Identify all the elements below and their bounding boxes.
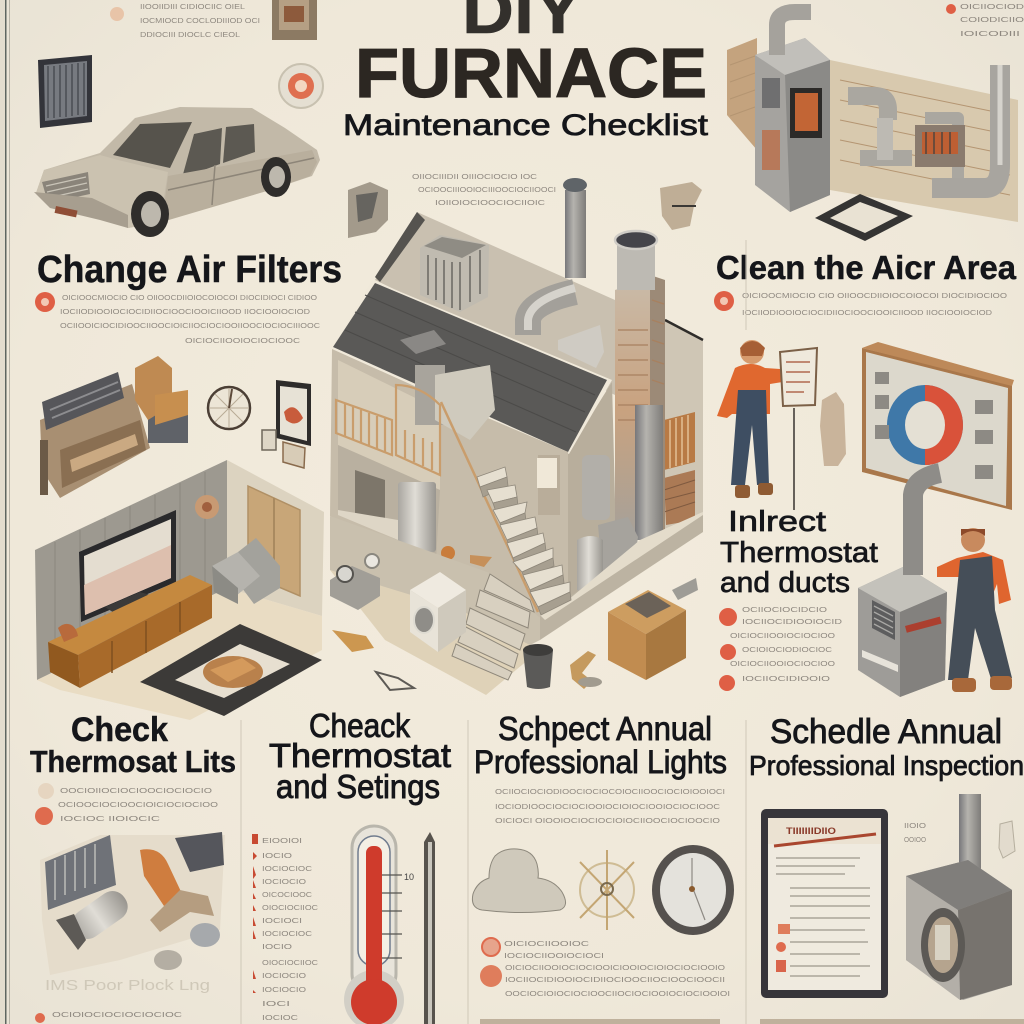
text block: lights note: IOCIODIOOCIOCIOCIOOIOCIOIOCIOOIOCIOCIOOC [495,804,720,811]
icon: red badge [279,64,323,108]
front steps [452,574,534,680]
text block: lights bullets [480,938,730,998]
icon: wall picture [272,0,317,40]
heading: check thermostat lits: Check [71,711,168,749]
text block: faded footer [35,977,210,1023]
heading: schpect annual professional lights: Professional Lights [474,744,727,780]
attic back wall [375,212,615,395]
icon: remote [672,578,698,600]
icon: console unit [330,554,380,610]
panel: schpect annual professional lights [472,710,734,1024]
text block: settings list: EIOOIOI [262,838,302,845]
panel: change air filters [34,0,342,498]
entry floor [330,570,540,695]
ductwork [848,65,1000,195]
icon: rug [140,624,322,716]
heading: check thermostat and settings: Cheack [309,707,410,744]
icon: pressure gauge [652,845,734,935]
heading: schedule annual professional inspection: Schedle Annual [770,713,1002,751]
front wall [330,349,568,618]
text block: settings list: IOCI [262,1001,290,1008]
text block: lights bullets: OOCIOCIOIOCIOCIOOCIIOCIOCIOOIOCIOCIOOIOI [505,991,730,998]
panel: inspect thermostat and ducts [717,340,1014,697]
heading: change air filters: Change Air Filters [37,249,342,291]
text block: settings list: IOCIOCIO [262,879,307,886]
text block: filters note: OCIIOOICIOCIDIOOCIIOOCIOICIIOCIOCIOOIIOOCIOCIOCIIIOOC [60,323,320,330]
text block: settings list: OIOCIOCIIOC [262,960,318,967]
text block: inspect note [719,607,842,691]
heading: check thermostat lits [30,711,236,779]
left margin rule [0,0,10,1024]
text block: inspect note: OICIOCIIOOIOCIOCIOO [730,661,836,668]
heading: inspect thermostat and ducts: Inlrect [728,506,826,538]
top text snippet: DDIOCIII DIOCLC CIEOL [140,32,240,39]
text block: inspect note: IOCIIOCIDIOOIO [742,676,831,683]
text block: lights note: OCIIOCIOCIODIOOCIOCIOCOIOCIIOOCIOCIOIOOIOCI [495,789,725,796]
icon: vent pipe and thermostat unit [906,794,1012,1000]
text block: filters note [35,292,320,345]
icon: small parts left [348,182,388,238]
panel: check thermostat lits [30,711,236,1023]
staircase [477,467,571,615]
text block: lights bullets: OICIOCIIOOIOCIOCIOOICIOOIOCIOIOCIOCIOOIO [505,965,726,972]
icon: armchair [212,538,280,604]
icon: inspection clipboard [761,809,888,998]
right room furnace parts [537,455,638,596]
text block: settings list: OIOCIOCIIOC [262,905,318,912]
text block: clean note [714,291,1008,317]
heading: clean the air area: Clean the Aicr Area [716,249,1017,286]
text block: settings list: IOCIOCIO [262,987,307,994]
icon: tv console [48,575,212,688]
text block: lits note: IOCIOC IIOIOCIC [60,816,160,823]
panel: schedule annual professional inspection [749,713,1024,1024]
icon: desk with equipment [40,356,188,498]
text block: settings list [252,834,318,1022]
icon: small frames [262,430,305,468]
text block: inspect note: OICIOCIIOOIOCIOCIOO [730,633,836,640]
text block: settings list: IOCIOCIOC [262,931,312,938]
chart: wall gauge display [862,342,1014,510]
text block: clean note: IOCIIODIOOIOCIOCIDIIOCIOOCIOOICIIOOD IIOCIOOIOCIOD [742,310,992,317]
heading: check thermostat and settings: Thermostat [269,737,451,774]
brick wall corner [727,38,1018,222]
heading: schedule annual professional inspection [749,713,1024,781]
chimney [615,231,665,545]
figure: technician [937,528,1012,692]
icon: small wall notes: IIOIO [904,823,927,830]
slab [540,512,703,640]
panel: living room [35,460,324,720]
text block: top right note: COIODICIIO [960,17,1024,24]
icon: television [79,510,176,622]
icon: small parts right [660,182,702,230]
icon: wall clock [208,387,250,429]
text block: centre note: OCIOOCIIIOOIOCIIIOOCIOCIIOOCI [418,187,556,194]
text block: lights note [495,789,725,825]
icon: air filter frame [38,55,92,128]
icon: inspection clipboard: TIIIIIIIDIIO [786,826,836,836]
text block: centre note: IOIIOIOCIOOCIOCIIOIC [435,200,545,207]
lower floor room [338,445,492,567]
icon: framed picture [276,380,311,446]
text block: filters note: IOCIIODIOOIOCIOCIDIIOCIOOCIOOICIIOOD IIOCIOOIOCIOD [60,309,310,316]
panel: central house cutaway [330,174,703,695]
icon: bin [523,644,553,689]
text block: filters note: OICIOCIIOOIOCIOCIOOC [185,338,300,345]
icon: wedge scrap [332,630,374,652]
icon: attic air unit [420,235,489,312]
text block: lits note: OOCIOIIOCIOCIOOCIOCIOCIO [60,788,213,795]
text block: settings list: IOCIOCIO [262,973,307,980]
bottom strip [480,1019,720,1024]
text block: settings list: OICOCIOOC [262,892,312,899]
icon: small wall notes: OOIOO [904,837,927,844]
icon: small wall notes [904,821,1015,858]
attic duct elbow [528,288,604,368]
icon: wall badge [195,495,219,519]
right side wall [640,320,703,540]
icon: probe rod [424,832,435,1024]
icon: small tools [570,651,602,689]
text block: lits note [35,783,219,825]
text block: lights bullets: IOCIOCIIOOIOCIOCI [504,953,604,960]
panel: clean the air area [714,4,1024,317]
icon: car [34,107,320,237]
top text snippet [110,4,260,39]
balcony railing [336,385,538,612]
text block: settings list: IOCIO [262,944,293,951]
icon: parts assembly [40,832,225,975]
title: FURNACE [355,34,707,112]
room walls and floor [35,460,324,720]
text block: settings list: IOCIOCI [262,918,302,925]
icon: washing machine [410,572,466,652]
heading: inspect thermostat and ducts: Thermostat [720,537,878,569]
divider lines [241,240,746,1024]
text block: lits note: OCIOOCIOCIOOCIOICIOCIOCIOO [58,802,219,809]
icon: drawings left [376,672,414,690]
text block: lights note: OICIOCI OIOOIOCIOCIOCIOIOCIIOOCIOCIOOCIO [495,818,721,825]
text block: lights bullets: OICIOCIIOOIOC [504,941,589,948]
icon: compass [580,850,634,930]
house right section wall [568,382,615,600]
icon: furnace cabinet [755,12,830,212]
heading: check thermostat lits: Thermosat Lits [30,744,236,779]
text block: inspect note: OCIIOCIOCIDCIO [742,607,828,614]
upper floor room [338,330,495,490]
heading: inspect thermostat and ducts [720,506,878,599]
text block: clean note: OICIOOCMIOCIO CIO OIIOOCDIIOIOCOIOCOI DIOCIDIOCIOO [742,293,1008,300]
top text snippet: IOCMIOCD COCLODIIIOD OCI [140,18,260,25]
figure: woman with clipboard [717,340,817,510]
front foundation [330,516,540,660]
icon: cabinet box [608,590,686,680]
icon: cloud [472,849,566,912]
text block: centre note [412,174,556,207]
text block: faded footer: OCIOIOCIOCIOCIOCIOC [52,1012,182,1019]
icon: floor mat [815,194,913,241]
text block: settings list: IOCIOC [262,1015,298,1022]
text block: inspect note: IOCIIOCIDIOOIOCID [742,619,842,626]
text block: centre note: OIIOCIIIDII OIIIOCIOCIO IOC [412,174,537,181]
icon: thermometer [344,826,414,1024]
text block: lights bullets: IOCIIOCIDIOOIOCIDIIOCIOOCIIOCIOOCIOOCII [505,977,725,984]
text block: faded footer: IMS Poor Plock Lng [45,977,210,994]
right wall top edge [665,320,703,340]
heading: check thermostat and settings [269,707,451,805]
panel: check thermostat and settings [252,707,451,1024]
icon: heater unit [915,125,965,167]
text block: settings list: IOCIO [262,853,293,860]
top text snippet: IIOOIIDIII CIDIOCIIC OIEL [140,4,245,11]
text block: top right note: OICIIOCIOD [960,4,1024,11]
icon: gas furnace unit [858,473,947,697]
icon: thermometer: 10 [404,872,414,882]
text block: inspect note: OCIOIOCIODIOCIOC [742,647,832,654]
heading: schpect annual professional lights [474,710,727,780]
text block: filters note: OICIOOCMIOCIO CIO OIIOOCDIIOIOCOIOCOI DIOCIDIOCI CIDIOO [62,295,318,302]
text block: top right note [946,4,1024,38]
roof [332,280,612,454]
slab top [540,512,703,620]
attic side slope [375,212,425,282]
title [343,0,709,142]
heading: check thermostat and settings: and Setings [276,768,440,805]
text block: top right note: IOICODIII [960,31,1020,38]
icon: hanging tools [820,392,846,466]
flue pipe [563,178,587,278]
text block: settings list: IOCIOCIOC [262,866,312,873]
heading: inspect thermostat and ducts: and ducts [720,567,850,599]
bottom strip [760,1019,1024,1024]
heading: schpect annual professional lights: Schpect Annual [498,710,712,747]
icon: right wall crate [664,412,695,525]
title: Maintenance Checklist [343,109,709,142]
